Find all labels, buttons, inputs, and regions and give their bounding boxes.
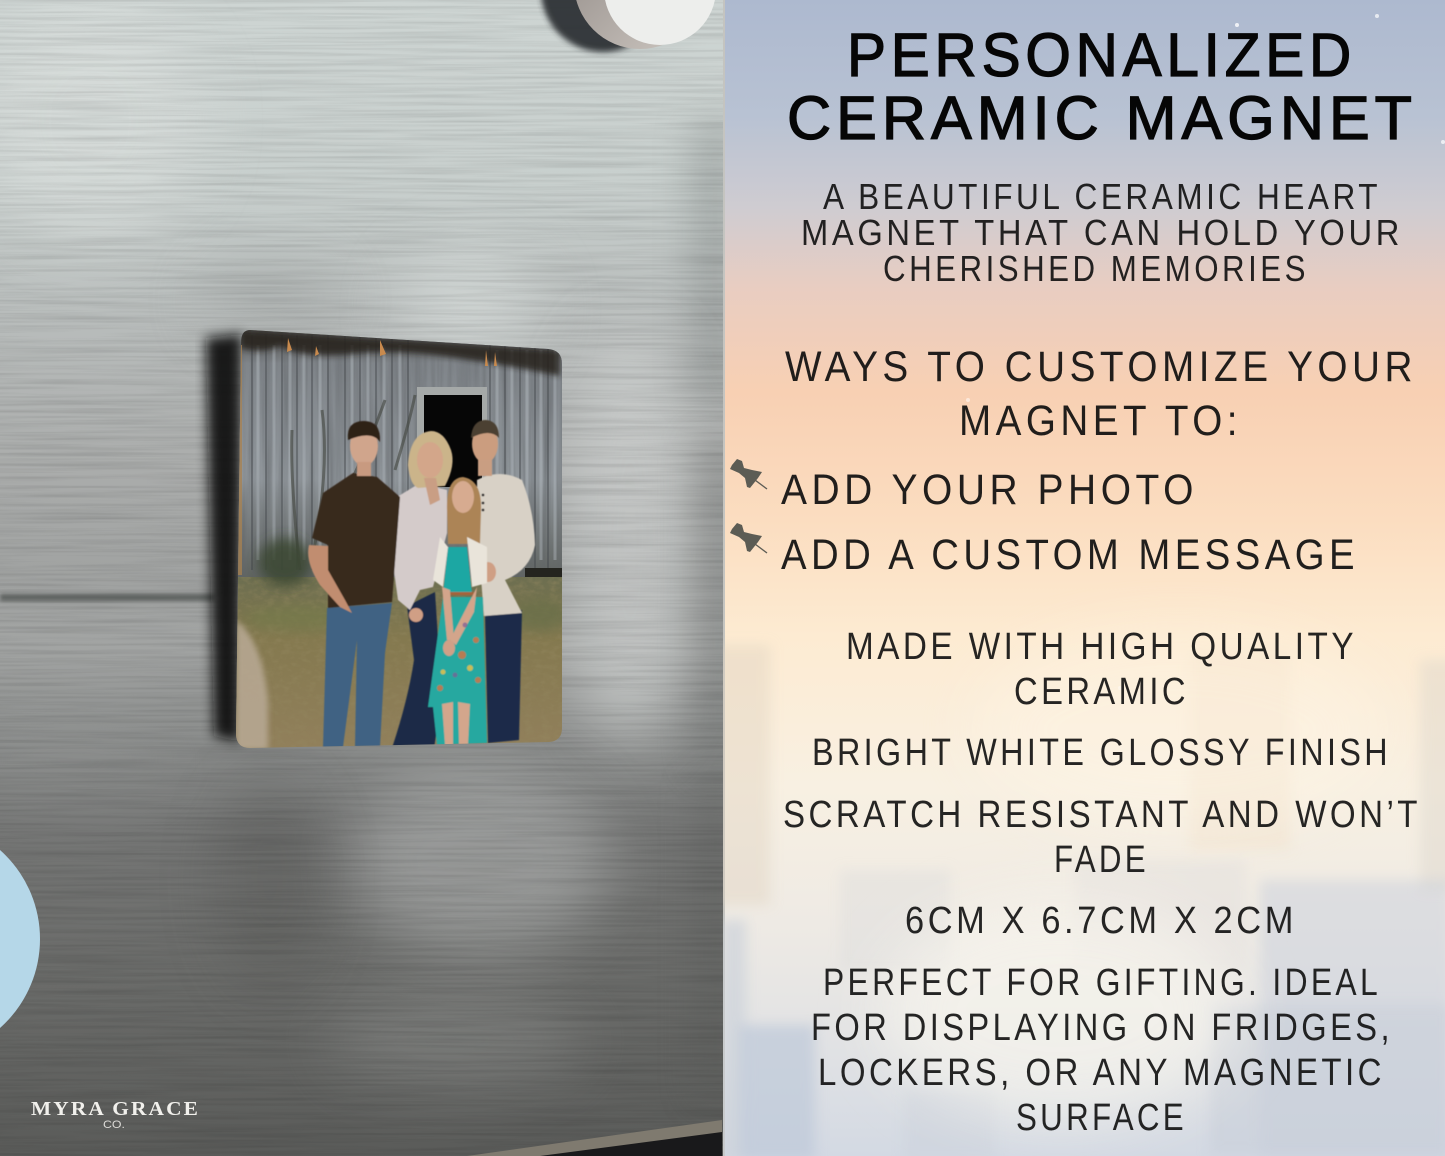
- grass: [236, 538, 568, 753]
- barn wall: [236, 328, 566, 580]
- logo: Myra Grace Co.: CO.: [103, 1119, 125, 1131]
- photo magnet: family portrait in front of a barn: [230, 325, 570, 755]
- icon: white round magnet at top: [541, 0, 716, 52]
- daughter: [428, 477, 487, 745]
- son: [308, 421, 400, 747]
- magnet shadow: [206, 334, 242, 742]
- feature: gifting and uses: [811, 962, 1393, 1139]
- feature: scratch resistant: [783, 794, 1421, 881]
- text block: product description: [801, 176, 1403, 289]
- father: [471, 420, 535, 743]
- feature: scratch resistant: FADE: [1054, 839, 1149, 881]
- icon: pale blue round magnet at left edge: [0, 820, 40, 1058]
- logo: Myra Grace Co.: MYRA GRACE: [31, 1098, 200, 1120]
- title: [787, 21, 1417, 152]
- feature: high quality ceramic: MADE WITH HIGH QUALITY: [846, 626, 1357, 668]
- icon: push pin: [730, 459, 767, 489]
- icon: push pin: [730, 523, 767, 553]
- logo: Myra Grace Co.: [31, 1098, 200, 1131]
- heading: ways to customize: MAGNET TO:: [959, 397, 1242, 445]
- feature: dimensions: 6CM X 6.7CM X 2CM: [905, 900, 1297, 942]
- text block: product description: CHERISHED MEMORIES: [883, 248, 1309, 289]
- list item: add your photo: ADD YOUR PHOTO: [781, 466, 1198, 514]
- title: CERAMIC MAGNET: [787, 84, 1417, 152]
- panel: watercolor sunset background: [716, 0, 1445, 1156]
- heading: ways to customize: [785, 343, 1417, 445]
- family figures: [308, 420, 535, 748]
- title: PERSONALIZED: [847, 21, 1356, 89]
- mother: [392, 431, 453, 748]
- panel: brushed steel fridge door: [0, 0, 740, 1156]
- feature: gifting and uses: SURFACE: [1016, 1097, 1187, 1139]
- text block: product description: MAGNET THAT CAN HOLD YOUR: [801, 212, 1403, 253]
- barn door: [417, 387, 487, 487]
- feature: high quality ceramic: CERAMIC: [1014, 671, 1189, 713]
- feature: high quality ceramic: [846, 626, 1357, 713]
- text block: product description: A BEAUTIFUL CERAMIC HEART: [823, 176, 1381, 217]
- list item: add a custom message: ADD A CUSTOM MESSAGE: [781, 531, 1359, 579]
